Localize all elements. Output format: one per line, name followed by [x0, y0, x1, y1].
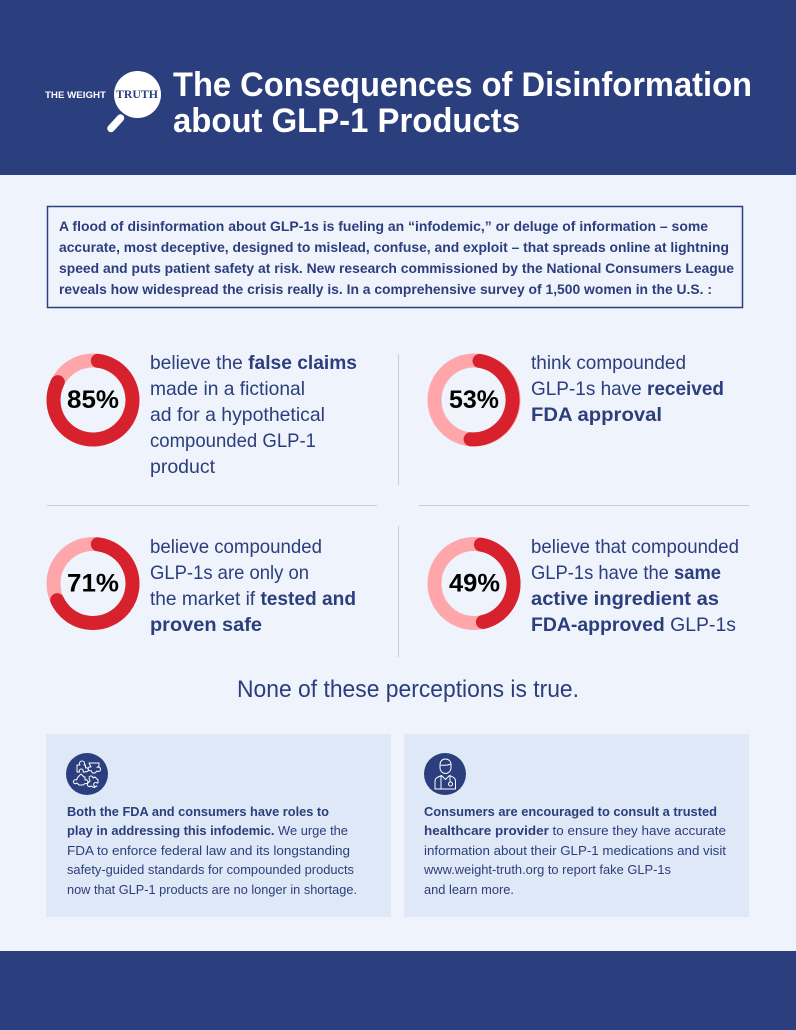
stat text: false claims: made in a fictional — [150, 378, 305, 400]
panel: consult a healthcare provider — [404, 734, 749, 917]
panel text: information about their GLP-1 medications and visit — [424, 843, 726, 858]
panel text: Both the FDA and consumers have roles to — [67, 804, 329, 819]
stat text: false claims: ad for a hypothetical — [150, 404, 325, 426]
stat text: false claims: believe the false claims — [150, 352, 357, 374]
donut chart: 49%: 49% — [449, 570, 500, 598]
title — [173, 66, 752, 140]
stat text: FDA approval — [531, 352, 724, 426]
stat text: FDA approval: think compounded — [531, 352, 686, 374]
stat text: same active ingredient: FDA-approved GLP-1s — [531, 614, 736, 636]
stat text: false claims: compounded GLP-1 — [150, 430, 316, 452]
stat text: FDA approval: GLP-1s have received — [531, 378, 724, 400]
logo: The Weight Truth magnifier — [45, 71, 161, 128]
donut chart: 71% — [54, 544, 132, 623]
conclusion heading: None of these perceptions is true. — [237, 676, 579, 703]
panel text: healthcare provider to ensure they have accurate — [424, 823, 726, 838]
donut chart: 71%: 71% — [67, 570, 119, 598]
donut chart: 49% — [434, 544, 514, 623]
title: The Consequences of Disinformation — [173, 66, 752, 104]
intro text box: A flood of disinformation about GLP-1s is fueling an “infodemic,” or deluge of information – some — [59, 218, 708, 234]
title: about GLP-1 Products — [173, 102, 520, 140]
intro text box: accurate, most deceptive, designed to mislead, confuse, and exploit – that spreads online at lightning — [59, 239, 729, 255]
stat text: same active ingredient — [531, 536, 739, 636]
panel text: and learn more. — [424, 882, 514, 897]
stat text: tested and proven safe: proven safe — [150, 614, 262, 636]
stat text: false claims — [150, 352, 357, 478]
panel text — [67, 804, 357, 897]
stat text: tested and proven safe: believe compounded — [150, 536, 322, 558]
donut chart: 53% — [434, 360, 514, 440]
stat text: tested and proven safe: the market if tested and — [150, 588, 356, 610]
panel text: now that GLP-1 products are no longer in shortage. — [67, 882, 357, 897]
stat text: same active ingredient: believe that compounded — [531, 536, 739, 558]
stat text: same active ingredient: GLP-1s have the same — [531, 562, 721, 584]
panel text: FDA to enforce federal law and its longstanding — [67, 843, 350, 858]
icon: puzzle pieces — [66, 753, 108, 795]
stat: 71 percent — [54, 536, 356, 636]
panel text: safety-guided standards for compounded products — [67, 862, 354, 877]
intro text box: reveals how widespread the crisis really is. In a comprehensive survey of 1,500 women in the U.S. : — [59, 281, 712, 297]
donut chart: 85% — [54, 360, 133, 440]
panel text: play in addressing this infodemic. We urge the — [67, 823, 348, 838]
intro text box: speed and puts patient safety at risk. New research commissioned by the National Consumers League — [59, 260, 734, 276]
logo: The Weight Truth magnifier: TRUTH — [116, 87, 159, 101]
stat text: tested and proven safe: GLP-1s are only on — [150, 562, 309, 584]
header banner — [0, 0, 796, 175]
stat text: same active ingredient: active ingredient as — [531, 588, 719, 610]
stat text: tested and proven safe — [150, 536, 356, 636]
panel text: Consumers are encouraged to consult a trusted — [424, 804, 717, 819]
stat: 85 percent — [54, 352, 357, 478]
stat: 53 percent — [434, 352, 724, 440]
footer banner — [0, 951, 796, 1030]
logo: The Weight Truth magnifier: THE WEIGHT — [45, 90, 107, 100]
stat text: FDA approval: FDA approval — [531, 404, 662, 426]
icon: doctor — [424, 753, 466, 795]
panel: roles of FDA and consumers — [46, 734, 391, 917]
stat: 49 percent — [434, 536, 739, 636]
intro text box — [48, 206, 742, 308]
stat text: false claims: product — [150, 456, 216, 478]
donut chart: 85%: 85% — [67, 386, 119, 414]
donut chart: 53%: 53% — [449, 386, 499, 414]
panel text — [423, 804, 726, 897]
panel text: www.weight-truth.org to report fake GLP-1s — [423, 862, 671, 877]
